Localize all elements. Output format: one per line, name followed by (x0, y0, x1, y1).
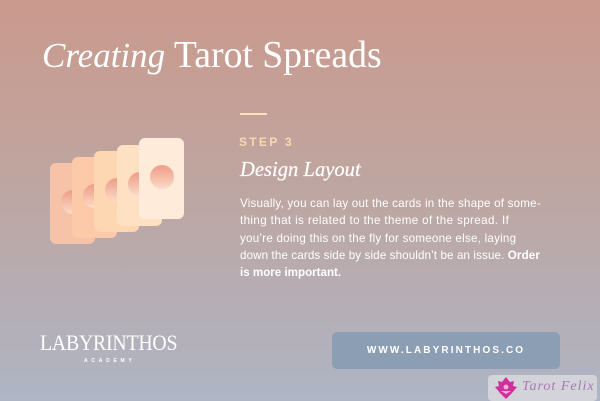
card 2 (72, 157, 117, 238)
logo subtitle: ACADEMY (84, 358, 136, 364)
body text: thing that is related to the theme of the spread. If (240, 214, 509, 227)
title: Creating Tarot Spreads (42, 34, 382, 76)
subheading: Design Layout (240, 159, 361, 181)
website button label: WWW.LABYRINTHOS.CO (367, 345, 525, 356)
body text: you’re doing this on the fly for someone else, laying (240, 232, 516, 245)
website button (332, 332, 560, 369)
body text: down the cards side by side shouldn’t be an issue. Order (240, 249, 540, 262)
card 4 (117, 145, 162, 226)
card 1 (50, 163, 95, 244)
body text: is more important. (240, 266, 341, 279)
body text: Visually, you can lay out the cards in the shape of some- (240, 197, 541, 210)
watermark text: Tarot Felix (522, 379, 595, 394)
logo wordmark: LABYRINTHOS (40, 330, 177, 355)
logo: Labyrinthos Academy (40, 330, 177, 364)
step label: STEP 3 (239, 135, 294, 149)
icon: lotus (495, 377, 517, 399)
body text (240, 197, 541, 279)
watermark badge: Tarot Felix (488, 375, 597, 401)
icon: fanned tarot cards (50, 138, 184, 244)
card 3 (94, 151, 139, 232)
card 5 (139, 138, 184, 219)
accent line (240, 113, 267, 115)
